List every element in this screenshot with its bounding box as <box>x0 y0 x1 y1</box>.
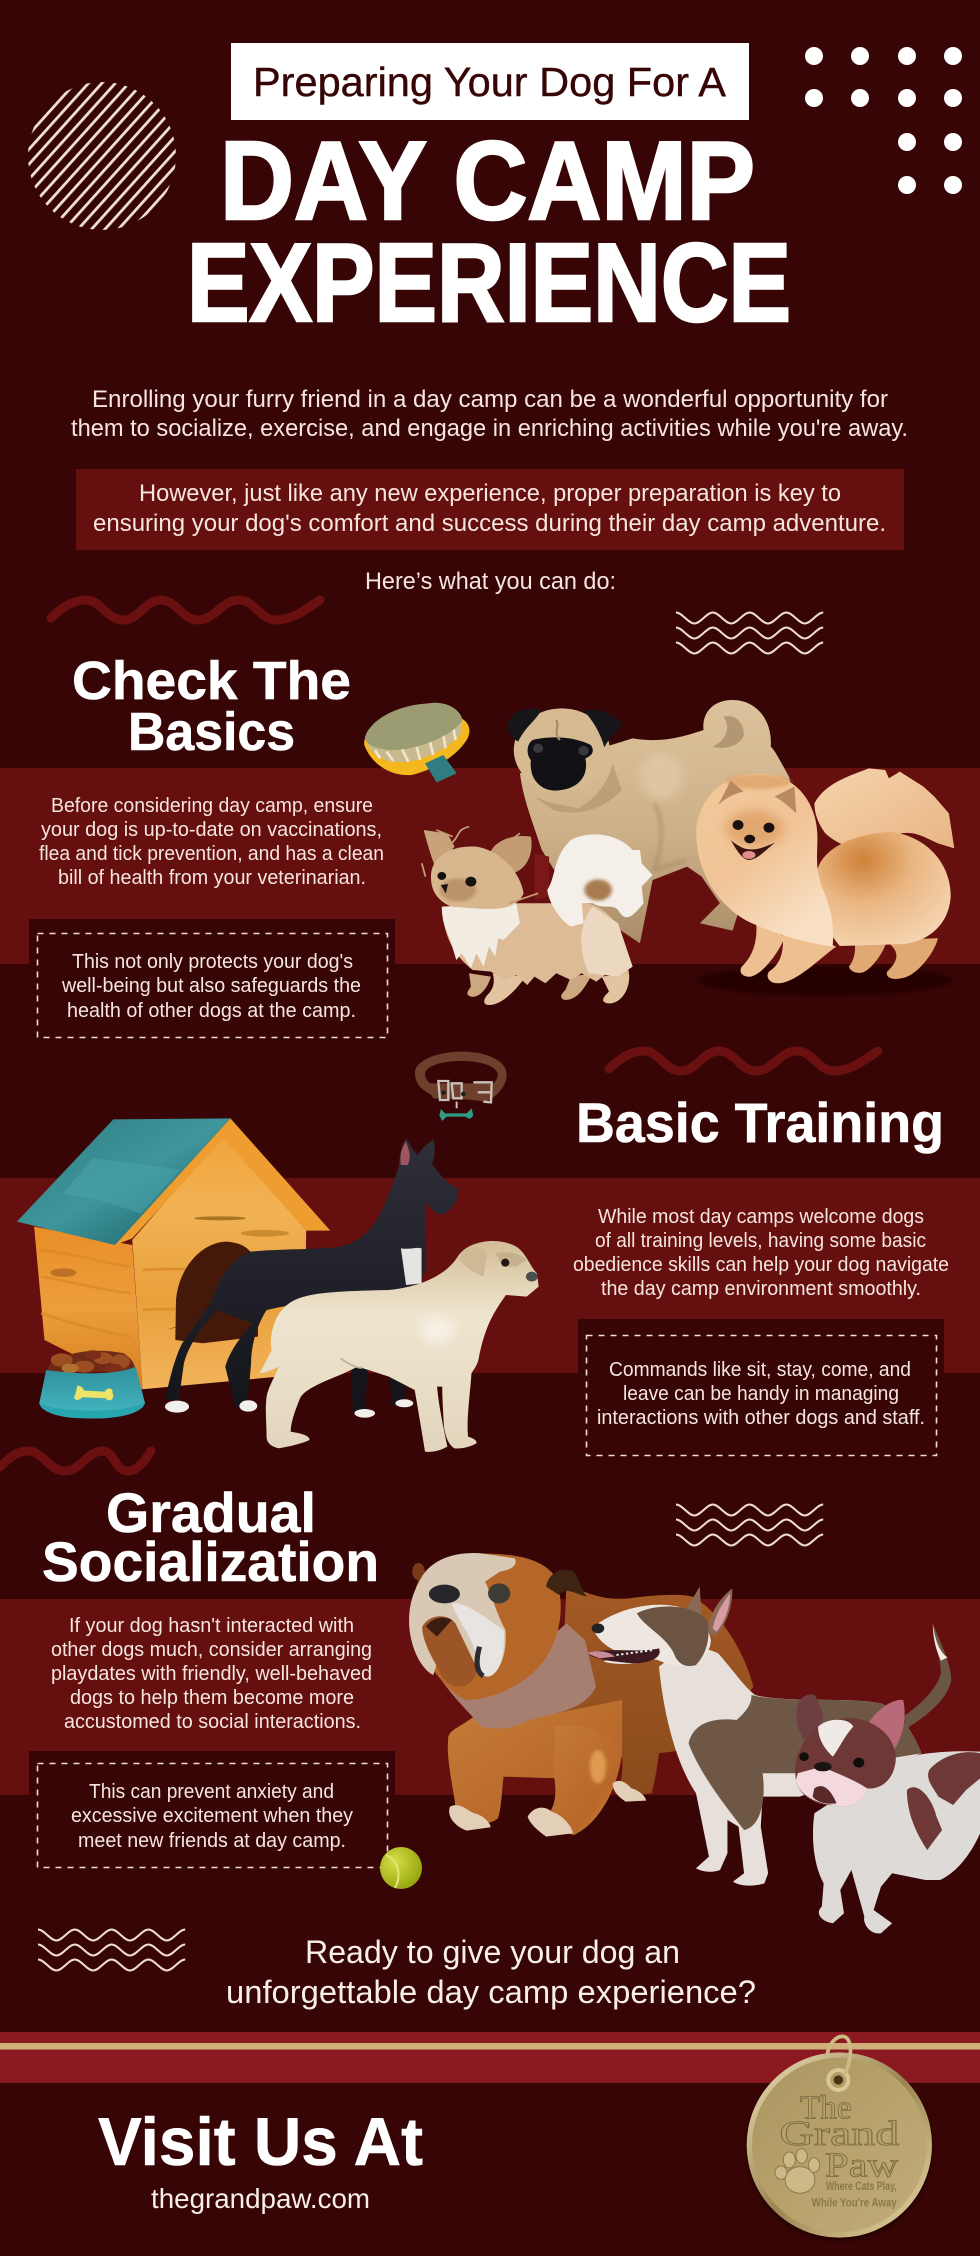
illustration: french bulldog <box>795 1694 980 1933</box>
medal tagline: Where Cats Play, <box>826 2179 897 2193</box>
call to action text <box>226 1934 756 2010</box>
medal lettering: The <box>800 2089 852 2126</box>
body text: If your dog hasn't interacted with <box>69 1615 354 1637</box>
body text <box>51 1615 372 1733</box>
heading: Check The <box>72 651 351 711</box>
medal lettering: Grand <box>779 2115 899 2153</box>
body text: other dogs much, consider arranging <box>51 1639 372 1661</box>
heading: day camp: DAY CAMP <box>220 119 755 243</box>
callout: Commands like sit, stay, come, and <box>609 1359 911 1381</box>
icon: dog collar <box>415 1052 507 1121</box>
body text: flea and tick prevention, and has a clean <box>39 843 384 865</box>
logo: the grand paw medal <box>746 2036 933 2241</box>
white waves middle <box>676 1504 823 1546</box>
subtitle box: Preparing Your Dog For A <box>253 59 727 105</box>
icon: dog brush <box>364 703 469 782</box>
dot grid decoration <box>805 47 962 194</box>
body text: playdates with friendly, well-behaved <box>51 1663 372 1685</box>
body text: dogs to help them become more <box>70 1687 354 1709</box>
illustration: dog food bowl <box>39 1350 145 1418</box>
illustration: bull terrier <box>587 1587 951 1886</box>
callout: health of other dogs at the camp. <box>67 1000 356 1022</box>
highlighted intro band <box>76 469 904 550</box>
body text: your dog is up-to-date on vaccinations, <box>41 819 382 841</box>
section: gradual socialization <box>29 1481 395 1876</box>
callout <box>29 1751 395 1876</box>
medal tagline: While You're Away <box>812 2196 897 2210</box>
callout: This can prevent anxiety and <box>89 1781 334 1803</box>
illustration: dog house <box>17 1118 330 1389</box>
intro text <box>71 386 908 442</box>
body text: Before considering day camp, ensure <box>51 795 373 817</box>
medal lettering <box>779 2089 899 2185</box>
heading <box>42 1481 379 1593</box>
call to action text: Ready to give your dog an <box>305 1934 680 1970</box>
body text: bill of health from your veterinarian. <box>58 867 366 889</box>
white waves top <box>676 612 823 654</box>
intro text: them to socialize, exercise, and engage in enriching activities while you're away. <box>71 415 908 442</box>
illustration: chihuahua <box>422 827 653 1005</box>
title block <box>187 43 791 345</box>
callout <box>578 1319 944 1464</box>
heading: Socialization <box>42 1530 379 1593</box>
subtitle box <box>231 43 749 120</box>
lead-in text: Here’s what you can do: <box>365 568 616 595</box>
callout <box>29 919 395 1047</box>
body text: obedience skills can help your dog navigate <box>573 1254 949 1276</box>
callout: excessive excitement when they <box>71 1805 353 1827</box>
footer: website: thegrandpaw.com <box>151 2183 370 2214</box>
call to action text: unforgettable day camp experience? <box>226 1974 756 2010</box>
highlighted intro band: ensuring your dog's comfort and success during their day camp adventure. <box>93 510 886 537</box>
medal lettering: Paw <box>825 2147 898 2185</box>
white waves bottom <box>38 1930 185 1970</box>
striped circle decoration <box>28 82 176 230</box>
heading: Gradual <box>106 1481 316 1544</box>
medal paw print <box>775 2149 820 2193</box>
body text: the day camp environment smoothly. <box>601 1278 921 1300</box>
heading: Basic Training <box>576 1091 944 1154</box>
callout: meet new friends at day camp. <box>78 1830 346 1852</box>
heading: Basics <box>128 702 295 762</box>
callout: interactions with other dogs and staff. <box>597 1407 925 1429</box>
heading: experience: EXPERIENCE <box>187 221 791 345</box>
body text <box>573 1206 949 1300</box>
illustration: labrador <box>260 1241 539 1452</box>
red squiggle top <box>51 600 320 620</box>
callout: well-being but also safeguards the <box>61 975 361 997</box>
section: basic training <box>573 1091 949 1464</box>
illustration: pomeranian <box>696 768 954 996</box>
section: check the basics <box>29 651 395 1047</box>
highlighted intro band: However, just like any new experience, proper preparation is key to <box>139 480 841 507</box>
footer stripes <box>0 2032 980 2083</box>
intro text: Enrolling your furry friend in a day camp can be a wonderful opportunity for <box>92 386 888 413</box>
body text: of all training levels, having some basic <box>595 1230 926 1252</box>
body text: accustomed to social interactions. <box>64 1711 361 1733</box>
illustration: pug <box>507 700 800 943</box>
footer: visit us heading: Visit Us At <box>98 2104 423 2180</box>
medal tagline <box>812 2179 897 2210</box>
heading <box>72 651 351 762</box>
body text: While most day camps welcome dogs <box>598 1206 924 1228</box>
illustration: bulldog <box>409 1553 753 1837</box>
body text <box>39 795 384 889</box>
callout: This not only protects your dog's <box>72 951 353 973</box>
illustration: great dane <box>165 1138 458 1418</box>
callout: leave can be handy in managing <box>623 1383 899 1405</box>
red squiggle lower <box>0 1451 151 1471</box>
red squiggle middle <box>609 1051 878 1071</box>
icon: tennis ball <box>380 1847 422 1889</box>
